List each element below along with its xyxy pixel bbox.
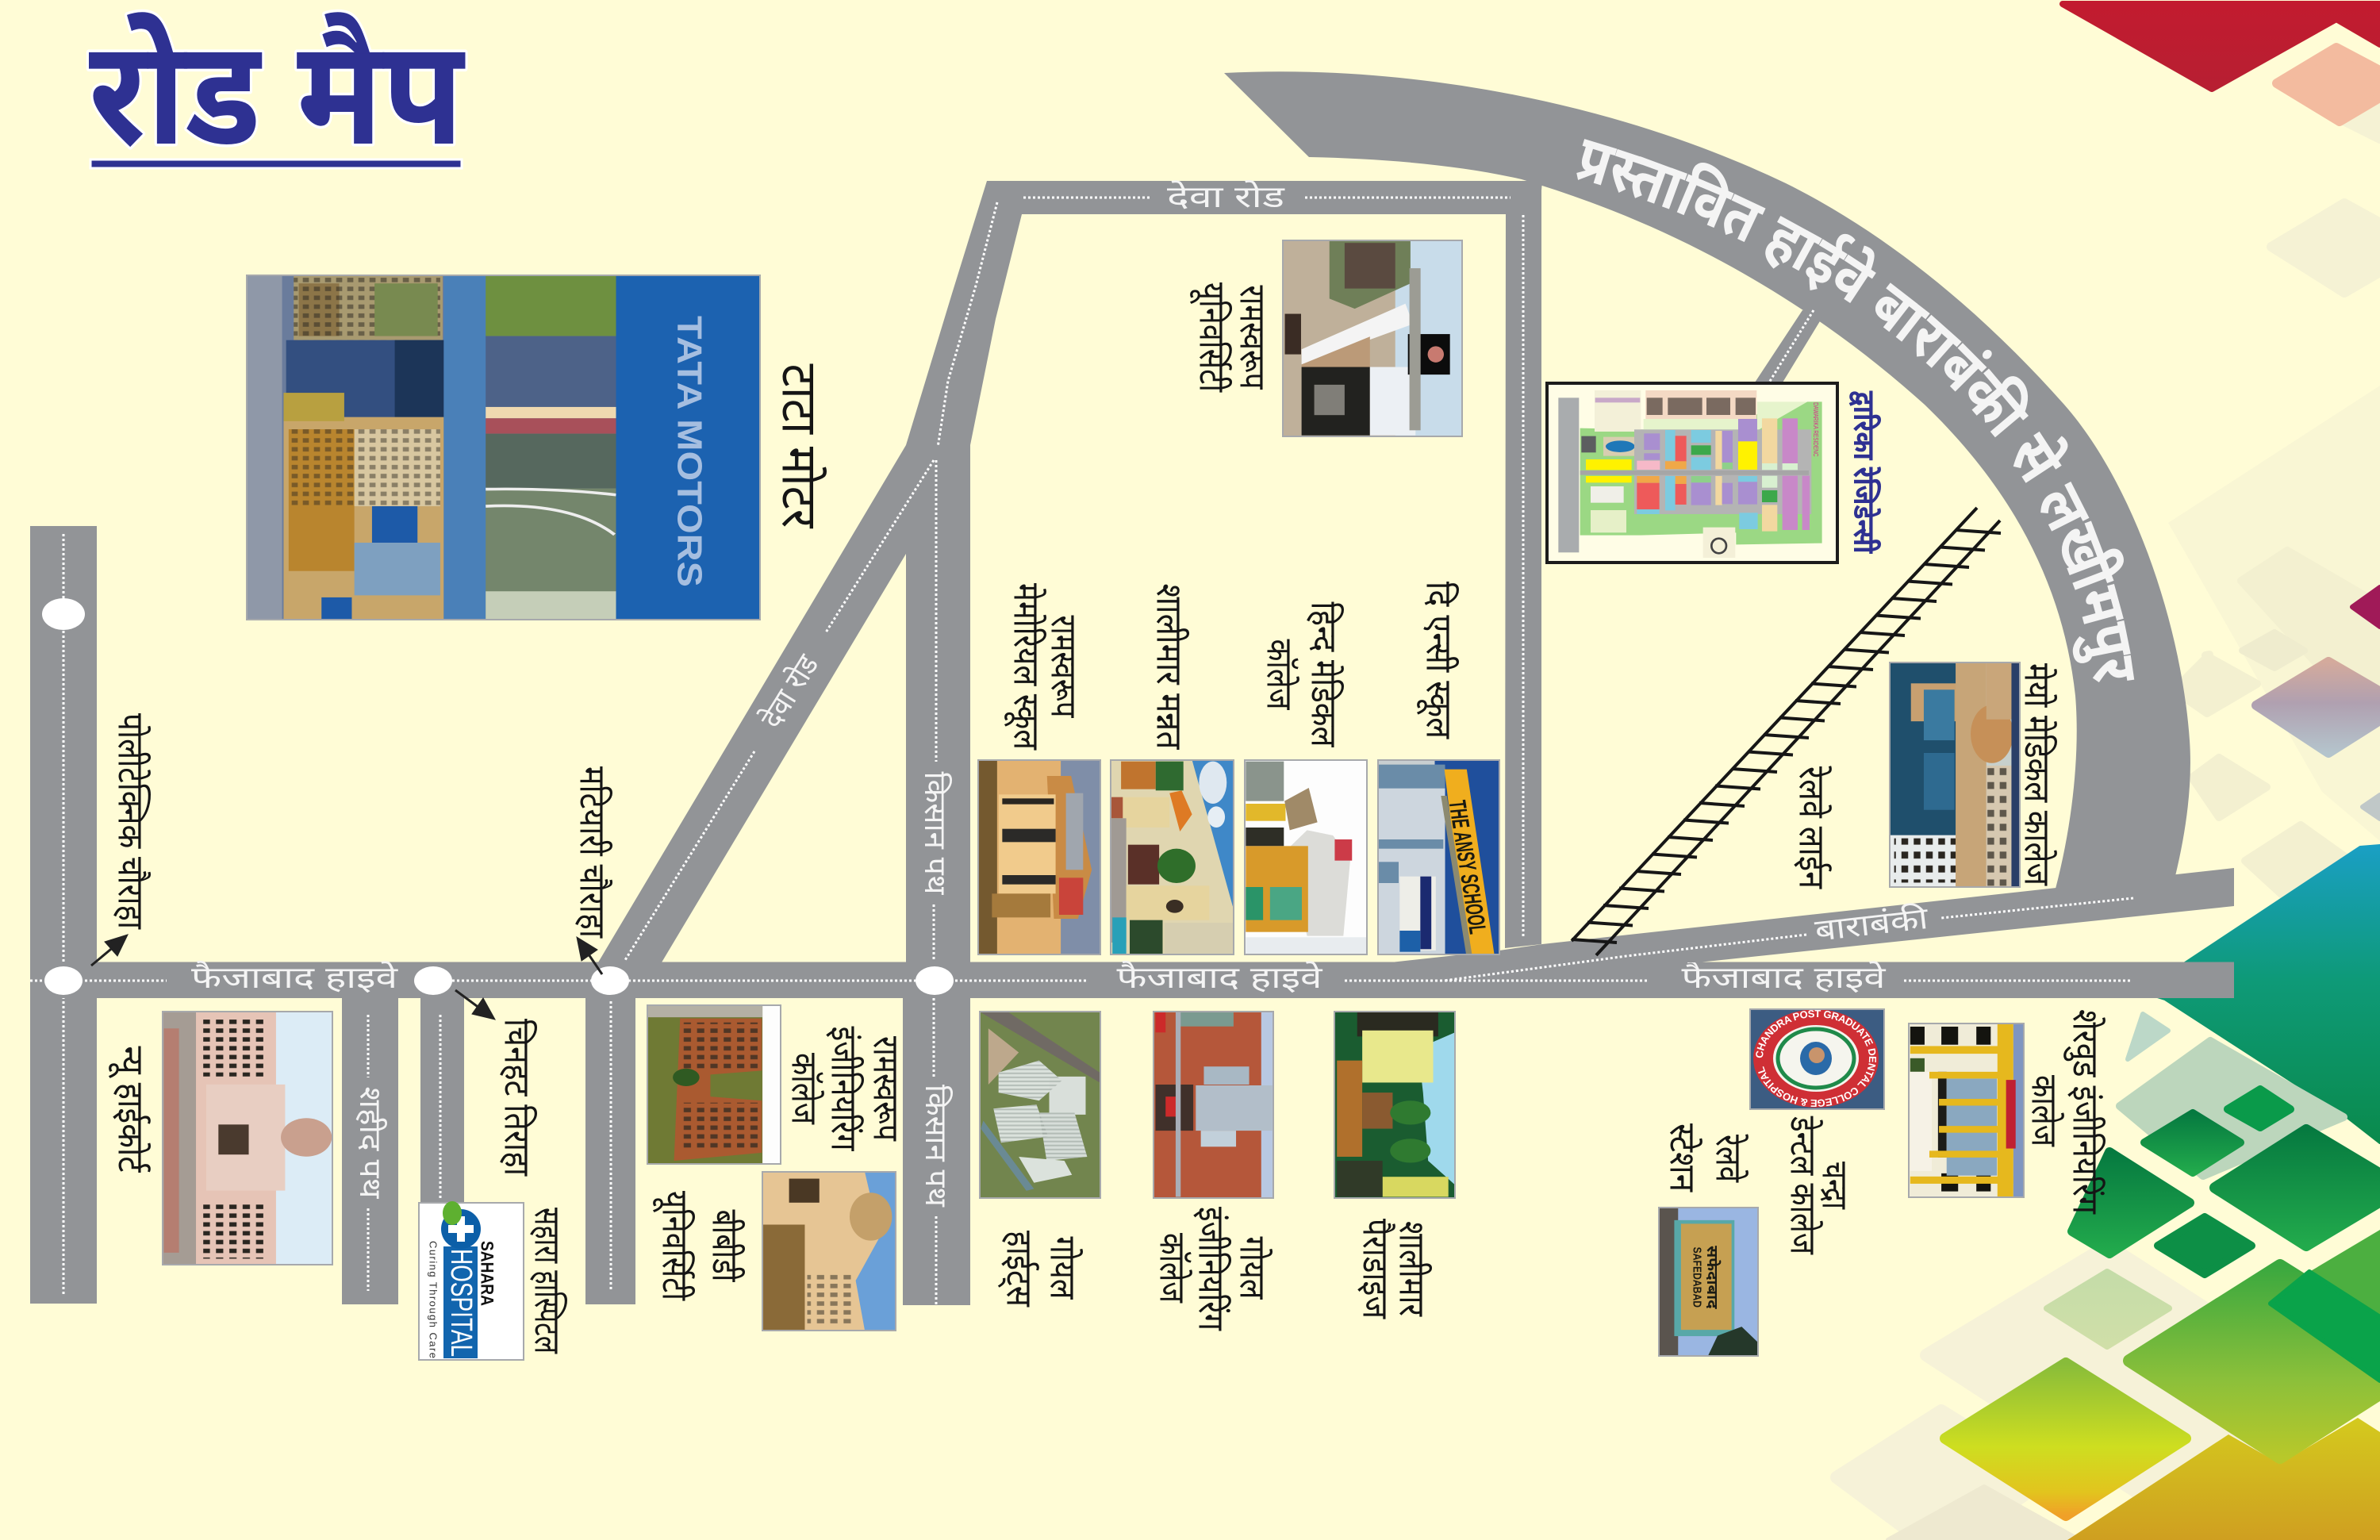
label: hind medical college [1260,601,1344,748]
label: shalimar paradise [1355,1219,1433,1319]
road: deva road upper with vertical branch [906,179,1542,948]
label: bbd university: बीबीडी [704,1209,746,1283]
road: link to dwarika residency [1755,310,1825,382]
road: left vertical polytechnic road [30,526,97,1304]
label: matiyari crossing: मटियारी चौराहा [573,766,612,939]
site plan: dwarika residency [1547,383,1837,563]
label: mayo medical college: मेयो मेडिकल कालेज [2017,663,2058,886]
label: shalimar mannat: शालीमार मन्नत [1149,584,1190,751]
photo: tata motors: TATA MOTORS [670,316,709,587]
label: ramswaroop memorial school: रामस्वरूप [1044,616,1084,719]
label: new high court: न्यू हाईकोर्ट [108,1046,151,1173]
photo: shalimar paradise [1334,1012,1455,1198]
junction markers [42,598,954,995]
decorative background diamonds [1837,4,2380,1540]
road: matiyari road lower [585,998,635,1304]
label: tata motors: टाटा मोटर [771,363,827,529]
label: goyal engineering college [1152,1207,1273,1331]
photo: ramswaroop memorial school [978,760,1100,954]
arrow: to chinhat tiraha [455,990,495,1020]
label: chandra dental college: डेन्टल कालेज [1783,1116,1823,1255]
photo: goyal heights [980,1012,1100,1198]
photo: new high court [163,1012,332,1265]
photo: safedabad railway station: सफेदाबाद [1704,1246,1722,1309]
photo: goyal engineering college [1154,1012,1273,1198]
road: kisan path upper and deva road diagonal: देवा रोड [754,648,826,735]
label: chandra dental college [1783,1116,1855,1255]
label: hind medical college: कॉलेज [1260,639,1299,711]
road: proposed highway arc: प्रस्तावित हाईवे बाराबंकी से लखीमपुर [1576,139,2134,682]
label: sherwood engineering college [2025,1009,2106,1215]
title: रोड मैप [89,12,466,175]
label: shalimar paradise: शालीमार [1392,1221,1433,1317]
logo: sahara hospital: Curing Through Care [427,1241,440,1358]
photo: safedabad railway station [1659,1208,1758,1356]
label: ramswaroop university [1190,282,1273,393]
road: faizabad highway: फैजाबाद हाइवे [1682,960,1887,995]
road: faizabad highway [30,960,2234,998]
label: hind medical college: हिन्द मेडिकल [1304,601,1344,748]
logo: sahara hospital [419,1201,524,1360]
label: sherwood engineering college: शेरवुड इंजीनियरिंग [2063,1009,2106,1215]
road: kisan path lower: किसान पथ [919,1085,954,1208]
photo: chandra dental college seal: CHANDRA POST GRADUATE DENTAL COLLEGE & HOSPITAL [1756,1010,1877,1107]
road: kisan path lower [903,998,970,1305]
label: goyal heights [997,1231,1084,1308]
site plan: dwarika residency: DAWARIKA RESIDENC [1812,402,1820,456]
label: ramswaroop university: रामस्वरूप [1233,286,1273,390]
label: ramswaroop memorial school: मेमोरियल स्कूल [1004,583,1047,751]
label: the ansy school: दि एन्सी स्कूल [1417,582,1460,739]
label: chinhat tiraha: चिनहट तिराहा [497,1019,538,1177]
label: chandra dental college: चन्द्रा [1815,1162,1855,1210]
photo: ramswaroop university [1283,240,1462,436]
logo: sahara hospital: HOSPITAL [444,1249,478,1357]
railway line [1572,508,2001,955]
label: ramswaroop memorial school [1004,583,1084,751]
label: goyal engineering college: इंजीनियरिंग [1192,1207,1231,1331]
photo: safedabad railway station: SAFEDABAD [1691,1247,1704,1308]
photo: bbd university [762,1172,896,1331]
photo: tata motors [247,275,760,620]
label: polytechnic crossing: पोलीटेक्निक चौराहा [111,713,151,930]
photo: the ansy school [1378,760,1499,954]
label: shalimar paradise: पैराडाइज [1355,1219,1396,1319]
label: sahara hospital: सहारा हास्पिटल [527,1208,568,1354]
road: deva road upper with vertical branch: देवा रोड [1167,179,1285,214]
road: barabanki branch [1391,868,2234,981]
road: faizabad highway: फैजाबाद हाइवे [191,960,398,995]
label: railway station: स्टेशन [1663,1123,1702,1192]
photo: shalimar mannat [1111,760,1234,954]
label: dwarika residency: द्वारिका रेजिडेन्सी [1847,390,1882,554]
logo: sahara hospital: SAHARA [478,1241,497,1306]
road: proposed highway arc [1224,71,2190,889]
label: ramswaroop engineering college: रामस्वरूप [866,1036,906,1142]
label: bbd university: यूनिवर्सिटी [652,1191,695,1301]
label: goyal engineering college: गोयल [1233,1236,1273,1300]
photo: hind medical college [1245,760,1367,954]
arrow: to polytechnic crossing [91,935,128,966]
label: goyal engineering college: कॉलेज [1152,1233,1193,1304]
label: goyal heights: हाईट्स [997,1231,1039,1308]
label: ramswaroop university: यूनिवर्सिटी [1190,282,1233,393]
label: sherwood engineering college: कालेज [2025,1075,2064,1147]
label: goyal heights: गोयल [1042,1236,1084,1300]
road: faizabad highway: फैजाबाद हाइवे [1117,960,1323,995]
label: railway station: रेलवे [1709,1134,1749,1183]
photo: sherwood engineering college [1909,1023,2024,1197]
label: railway station [1663,1123,1749,1192]
road: chinhat road [420,998,464,1204]
label: ramswaroop engineering college [784,1027,906,1151]
road: shaheed path [342,998,398,1304]
photo: ramswaroop engineering college [647,1005,781,1164]
photo: mayo medical college [1890,662,2020,887]
road: kisan path upper and deva road diagonal: किसान पथ [918,771,953,895]
road: shaheed path: शहीद पथ [353,1087,388,1199]
road: barabanki branch: बाराबंकी [1813,901,1931,948]
road: kisan path upper and deva road diagonal [598,445,970,962]
label: railway line: रेलवे लाईन [1791,766,1833,889]
label: ramswaroop engineering college: इंजीनियरिंग [823,1027,865,1151]
label: ramswaroop engineering college: कॉलेज [784,1053,825,1125]
arrow: to matiyari crossing [577,937,602,974]
label: bbd university [652,1191,746,1301]
